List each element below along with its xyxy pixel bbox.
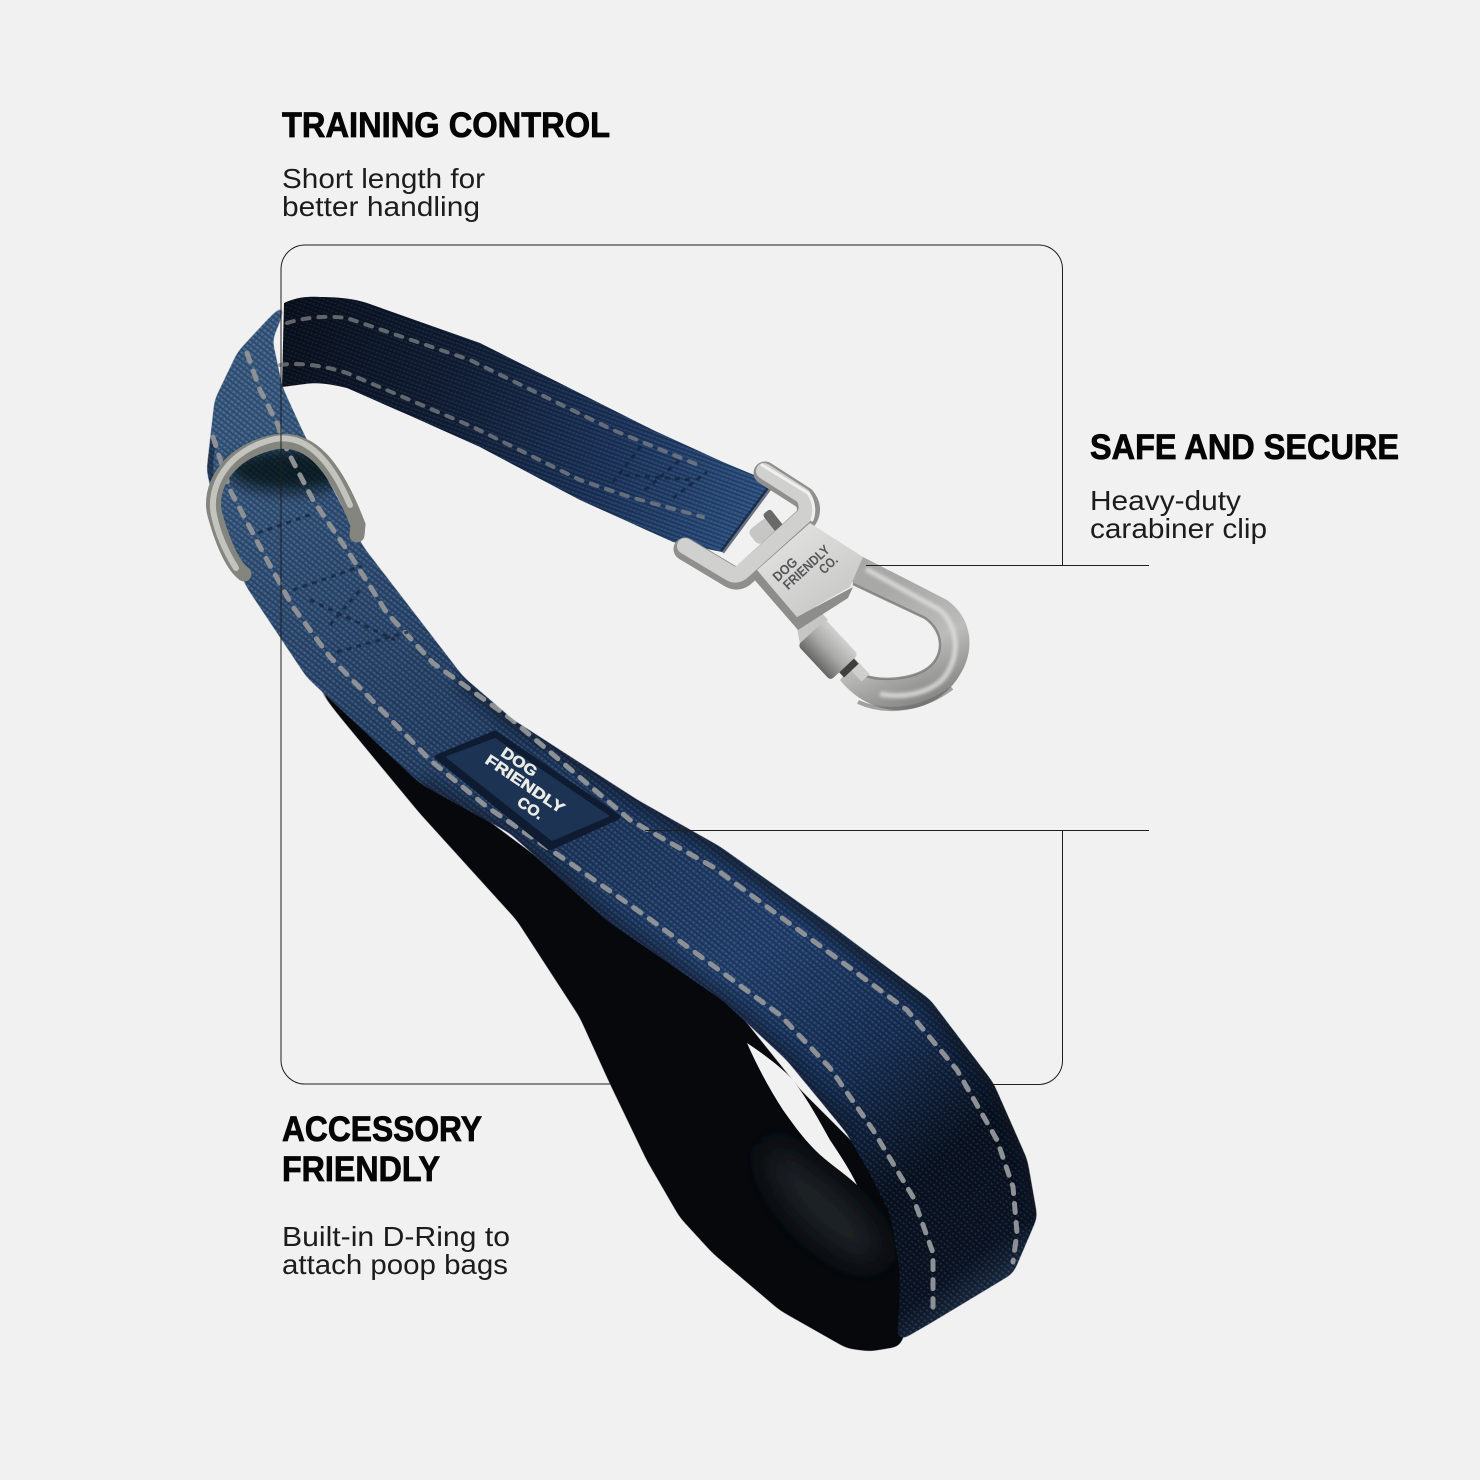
underside black padding	[322, 692, 904, 1352]
callout: training control: better handling	[282, 191, 480, 222]
callout: training control	[282, 105, 610, 222]
swivel pin	[745, 509, 786, 549]
callout: safe and secure	[1090, 427, 1399, 544]
patch label: DOG	[498, 744, 540, 781]
callout: training control: TRAINING CONTROL	[282, 105, 610, 145]
hook	[840, 557, 969, 710]
patch label: FRIENDLY	[482, 752, 568, 817]
callout: safe and secure: SAFE AND SECURE	[1090, 427, 1399, 467]
main strap face	[200, 290, 1050, 1360]
callout: accessory friendly: attach poop bags	[282, 1249, 508, 1280]
carabiner clip	[685, 465, 969, 710]
engraved label: DOG	[770, 554, 800, 584]
patch label	[472, 739, 576, 831]
leash product illustration	[200, 290, 1050, 1360]
callout frame and leader lines	[281, 245, 1149, 1085]
engraved label: CO.	[816, 552, 841, 577]
engraved label: FRIENDLY	[780, 542, 833, 593]
clip body	[752, 570, 853, 630]
callout: safe and secure: carabiner clip	[1090, 513, 1267, 544]
callout: accessory friendly: Built-in D-Ring to	[282, 1221, 510, 1252]
brand patch	[437, 733, 618, 848]
top strap	[280, 297, 773, 552]
d-ring	[213, 438, 358, 574]
callout: training control: Short length for	[282, 163, 485, 194]
engraved label	[770, 533, 842, 604]
swivel loop	[685, 465, 814, 578]
callout: accessory friendly: FRIENDLY	[282, 1149, 440, 1189]
gate link	[795, 603, 828, 644]
callout: accessory friendly: ACCESSORY	[282, 1109, 482, 1149]
callout: accessory friendly	[282, 1109, 510, 1280]
callout: safe and secure: Heavy-duty	[1090, 485, 1241, 516]
patch label: CO.	[514, 794, 546, 823]
handle opening	[747, 1043, 857, 1185]
neoprene lining	[766, 1140, 885, 1263]
gate	[798, 619, 873, 697]
